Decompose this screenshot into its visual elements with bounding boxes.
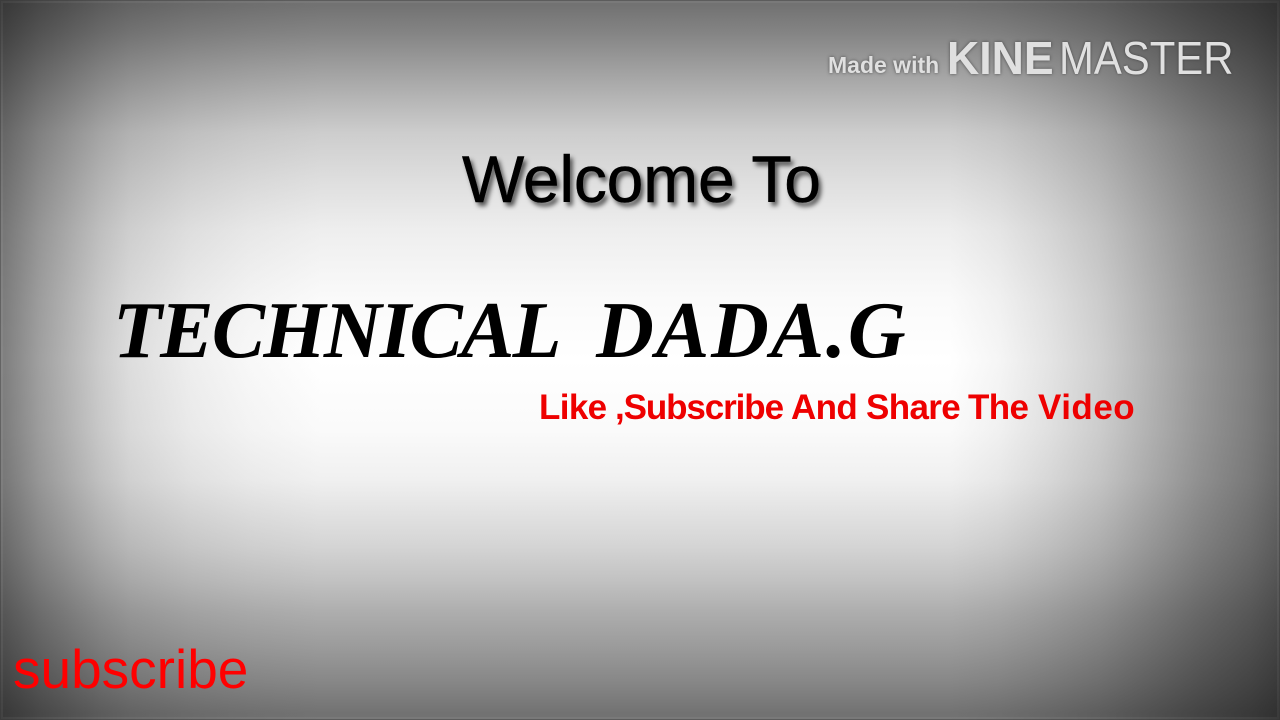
watermark: Made with KineMaster: MASTER	[1059, 32, 1233, 84]
call to action text: Share	[866, 388, 960, 427]
call to action text	[539, 388, 1135, 427]
watermark: Made with KineMaster: Made with	[828, 52, 939, 78]
watermark: Made with KineMaster	[828, 32, 1233, 84]
subscribe label: subscribe	[13, 638, 248, 700]
call to action text: Video	[1038, 388, 1135, 427]
call to action text: The	[968, 388, 1028, 427]
title: TECHNICAL DADA.G: TECHNICAL DADA.G	[113, 287, 908, 375]
watermark: Made with KineMaster: KINE	[947, 32, 1054, 84]
call to action text: And	[791, 388, 857, 427]
call to action text: Like	[539, 388, 607, 427]
heading: Welcome To: Welcome To	[462, 142, 821, 216]
call to action text: ,Subscribe	[615, 388, 783, 427]
